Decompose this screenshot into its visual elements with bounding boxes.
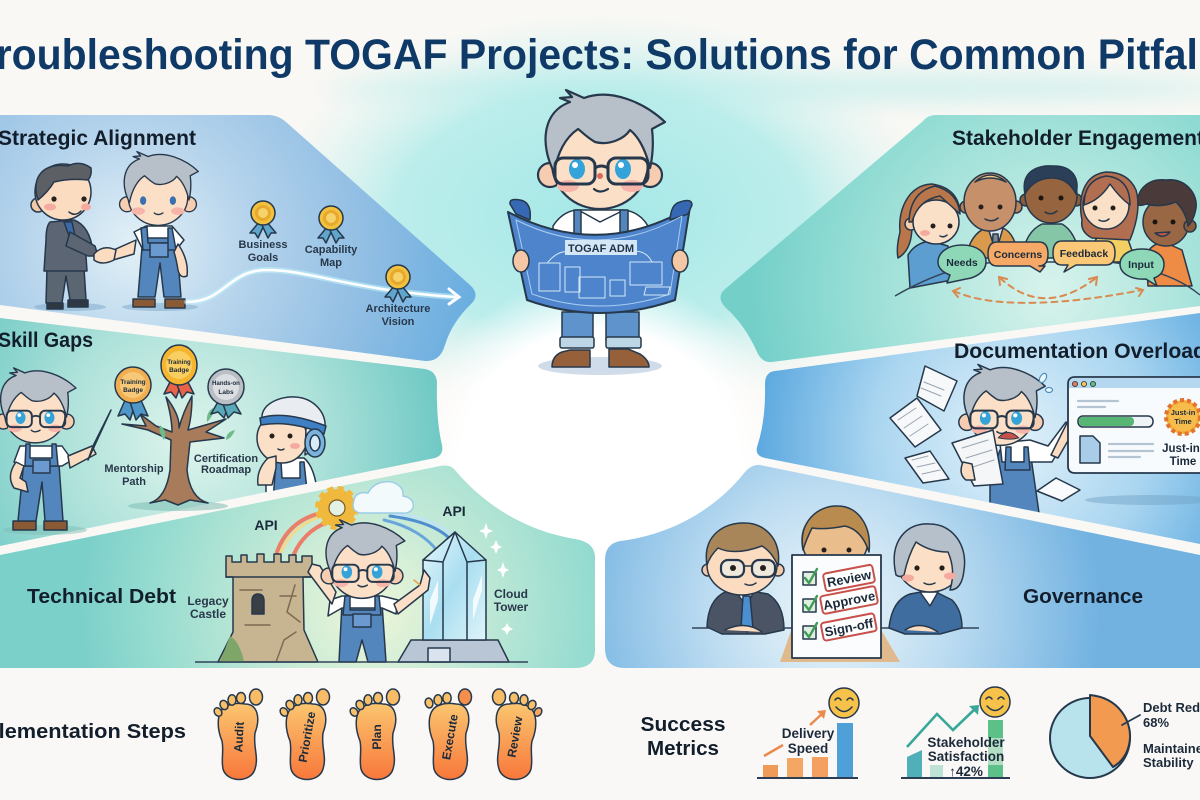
label: cloud tower: Tower [494, 600, 529, 614]
checklist item: review: Review [826, 567, 873, 590]
heading: success metrics [640, 714, 726, 760]
chart: debt reduction pie [1050, 695, 1200, 778]
milestone: architecture vision: Architecture [366, 303, 430, 315]
panel: skill gaps [0, 318, 442, 546]
heading: technical debt: Technical Debt [27, 586, 176, 608]
figure: mentor worker with pointer [3, 410, 111, 535]
label: delivery speed: Speed [788, 741, 828, 756]
bubble: feedback [1053, 241, 1115, 272]
bubble: input: Input [1128, 259, 1154, 271]
figure: overwhelmed worker [989, 421, 1068, 512]
footprint: review [492, 689, 543, 780]
central white halo [405, 275, 795, 665]
pie labels: 68% [1143, 715, 1169, 730]
footprint: review: Review [505, 715, 526, 759]
bottom strip [0, 669, 1200, 800]
label: API right: API [442, 503, 466, 519]
pie labels: Stability [1143, 755, 1194, 770]
bubble: concerns: Concerns [994, 249, 1042, 261]
bubble: needs: Needs [946, 257, 978, 269]
footprint: audit: Audit [231, 721, 247, 753]
person: reviewer in middle [802, 506, 869, 572]
label: just-in time: Time [1170, 456, 1196, 468]
heading: governance: Governance [1023, 586, 1143, 608]
footprint: plan [349, 689, 400, 780]
growth path arrow [187, 270, 459, 304]
worker head [321, 520, 405, 598]
milestone: capability map: Capability [305, 244, 358, 256]
label: delivery speed: Delivery [782, 726, 835, 741]
TOGAF ADM label: TOGAF ADM [568, 243, 634, 255]
milestone: capability map: Map [320, 257, 342, 269]
ground line [195, 661, 528, 663]
icon: gear [318, 489, 356, 527]
panel: stakeholder engagement [720, 115, 1200, 362]
badge: training center: Badge [169, 367, 189, 374]
checklist item: sign-off: Sign-off [823, 615, 875, 640]
legacy castle tower [218, 554, 318, 662]
worried head [959, 364, 1045, 445]
pie labels [1143, 700, 1200, 770]
milestone: business goals [239, 201, 287, 264]
label: mentorship path: Mentorship [104, 463, 164, 475]
person: child with curly hair [1138, 180, 1196, 286]
milestone: architecture vision: Vision [382, 316, 415, 328]
label: cloud tower: Cloud [494, 587, 528, 601]
mascot head [538, 90, 665, 209]
label: just-in time: Just-in [1162, 443, 1200, 455]
panel: governance [605, 465, 1200, 668]
label: mentorship path [104, 463, 164, 488]
label: certification roadmap: Roadmap [201, 464, 251, 476]
person: senior reviewer [889, 524, 965, 634]
label: legacy castle: Legacy [187, 594, 229, 608]
bubble: needs [938, 245, 986, 283]
chart: delivery speed [757, 688, 859, 778]
dashed exchange arrows [953, 277, 1143, 303]
footprint: prioritize: Prioritize [296, 710, 318, 764]
footprint: audit [213, 689, 262, 780]
chart: stakeholder satisfaction [901, 687, 1010, 779]
table arc [895, 262, 1200, 296]
sweat drops [1038, 372, 1052, 392]
panel: documentation overload [757, 313, 1200, 544]
badge: training left: Badge [123, 387, 143, 394]
title glow [320, 74, 1200, 102]
held document stack [952, 430, 1003, 486]
footprint: plan: Plan [370, 724, 384, 750]
label: just-in time [1162, 443, 1200, 468]
heading: strategic alignment: Strategic Alignment [0, 127, 196, 150]
badge: training center: Training [167, 360, 191, 366]
panel: strategic alignment [0, 115, 476, 361]
label: certification roadmap: Certification [194, 453, 258, 465]
badge: training center [161, 345, 197, 398]
label: legacy castle [187, 594, 229, 621]
person: girl with long hair [897, 184, 960, 288]
blueprint diagram [539, 251, 670, 298]
smiley [829, 688, 859, 718]
milestone: business goals: Goals [248, 252, 278, 264]
heading: stakeholder engagement: Stakeholder Engagement [952, 127, 1200, 150]
footprint: execute [424, 689, 472, 780]
central mascot with blueprint [508, 90, 692, 375]
person: bald man in tan suit [960, 173, 1022, 258]
milestone: architecture vision [366, 265, 430, 328]
label: stakeholder satisfaction: Satisfaction [928, 749, 1004, 764]
figure: worker shaking hands [94, 226, 198, 311]
label: API left: API [254, 517, 278, 533]
heading: success metrics: Success [640, 714, 726, 736]
person: man in green [1020, 166, 1082, 258]
window shadow [1085, 495, 1200, 505]
checklist document [792, 555, 881, 658]
figure: worker bridging towers [308, 564, 430, 662]
floating papers [890, 366, 1080, 501]
mentor head [0, 368, 76, 443]
figure: learner with helmet [257, 397, 326, 500]
central teal glow [260, 10, 940, 420]
badge: training left [115, 367, 151, 420]
badge: just-in-time: Just-in [1171, 408, 1196, 417]
badge: just-in-time: Time [1174, 417, 1192, 426]
icon: cloud [353, 482, 413, 513]
badge: training left: Training [120, 379, 146, 386]
badge: hands-on labs [208, 369, 244, 418]
certification tree [122, 396, 235, 511]
label: stakeholder satisfaction: ↑42% [949, 764, 983, 779]
smiley [980, 687, 1010, 717]
panel: technical debt [0, 466, 595, 668]
bubble: feedback: Feedback [1060, 248, 1108, 260]
milestone: capability map [305, 206, 358, 269]
badge: hands-on labs: Labs [218, 389, 234, 396]
badge: just-in-time [1166, 400, 1200, 434]
heading: success metrics: Metrics [647, 738, 719, 760]
badge: hands-on labs: Hands-on [212, 381, 240, 387]
blueprint scroll [508, 200, 692, 313]
label: delivery speed [782, 726, 835, 756]
footprint: prioritize [279, 689, 330, 780]
checklist item: approve: Approve [822, 588, 876, 613]
footprint: execute: Execute [439, 713, 461, 761]
label: stakeholder satisfaction: Stakeholder [927, 735, 1005, 750]
sparkles [479, 523, 513, 635]
table [692, 628, 979, 662]
person: woman with auburn hair [1081, 172, 1138, 262]
milestone: business goals: Business [239, 239, 287, 251]
label: stakeholder satisfaction [927, 735, 1005, 779]
bubble: concerns [988, 242, 1048, 272]
label: certification roadmap [194, 453, 258, 476]
worker head [120, 152, 198, 225]
crystal cloud tower [398, 532, 509, 662]
API bridge arcs [277, 513, 456, 554]
label: cloud tower [494, 587, 529, 614]
figure: businessman [31, 163, 106, 311]
label: mentorship path: Path [122, 476, 146, 488]
person: reviewer with glasses [702, 523, 784, 634]
browser window [1068, 377, 1200, 473]
label: legacy castle: Castle [190, 607, 226, 621]
bubble: input [1120, 249, 1164, 286]
heading: skill gaps: Skill Gaps [0, 329, 93, 352]
heading: documentation overload: Documentation Overload [954, 340, 1200, 363]
